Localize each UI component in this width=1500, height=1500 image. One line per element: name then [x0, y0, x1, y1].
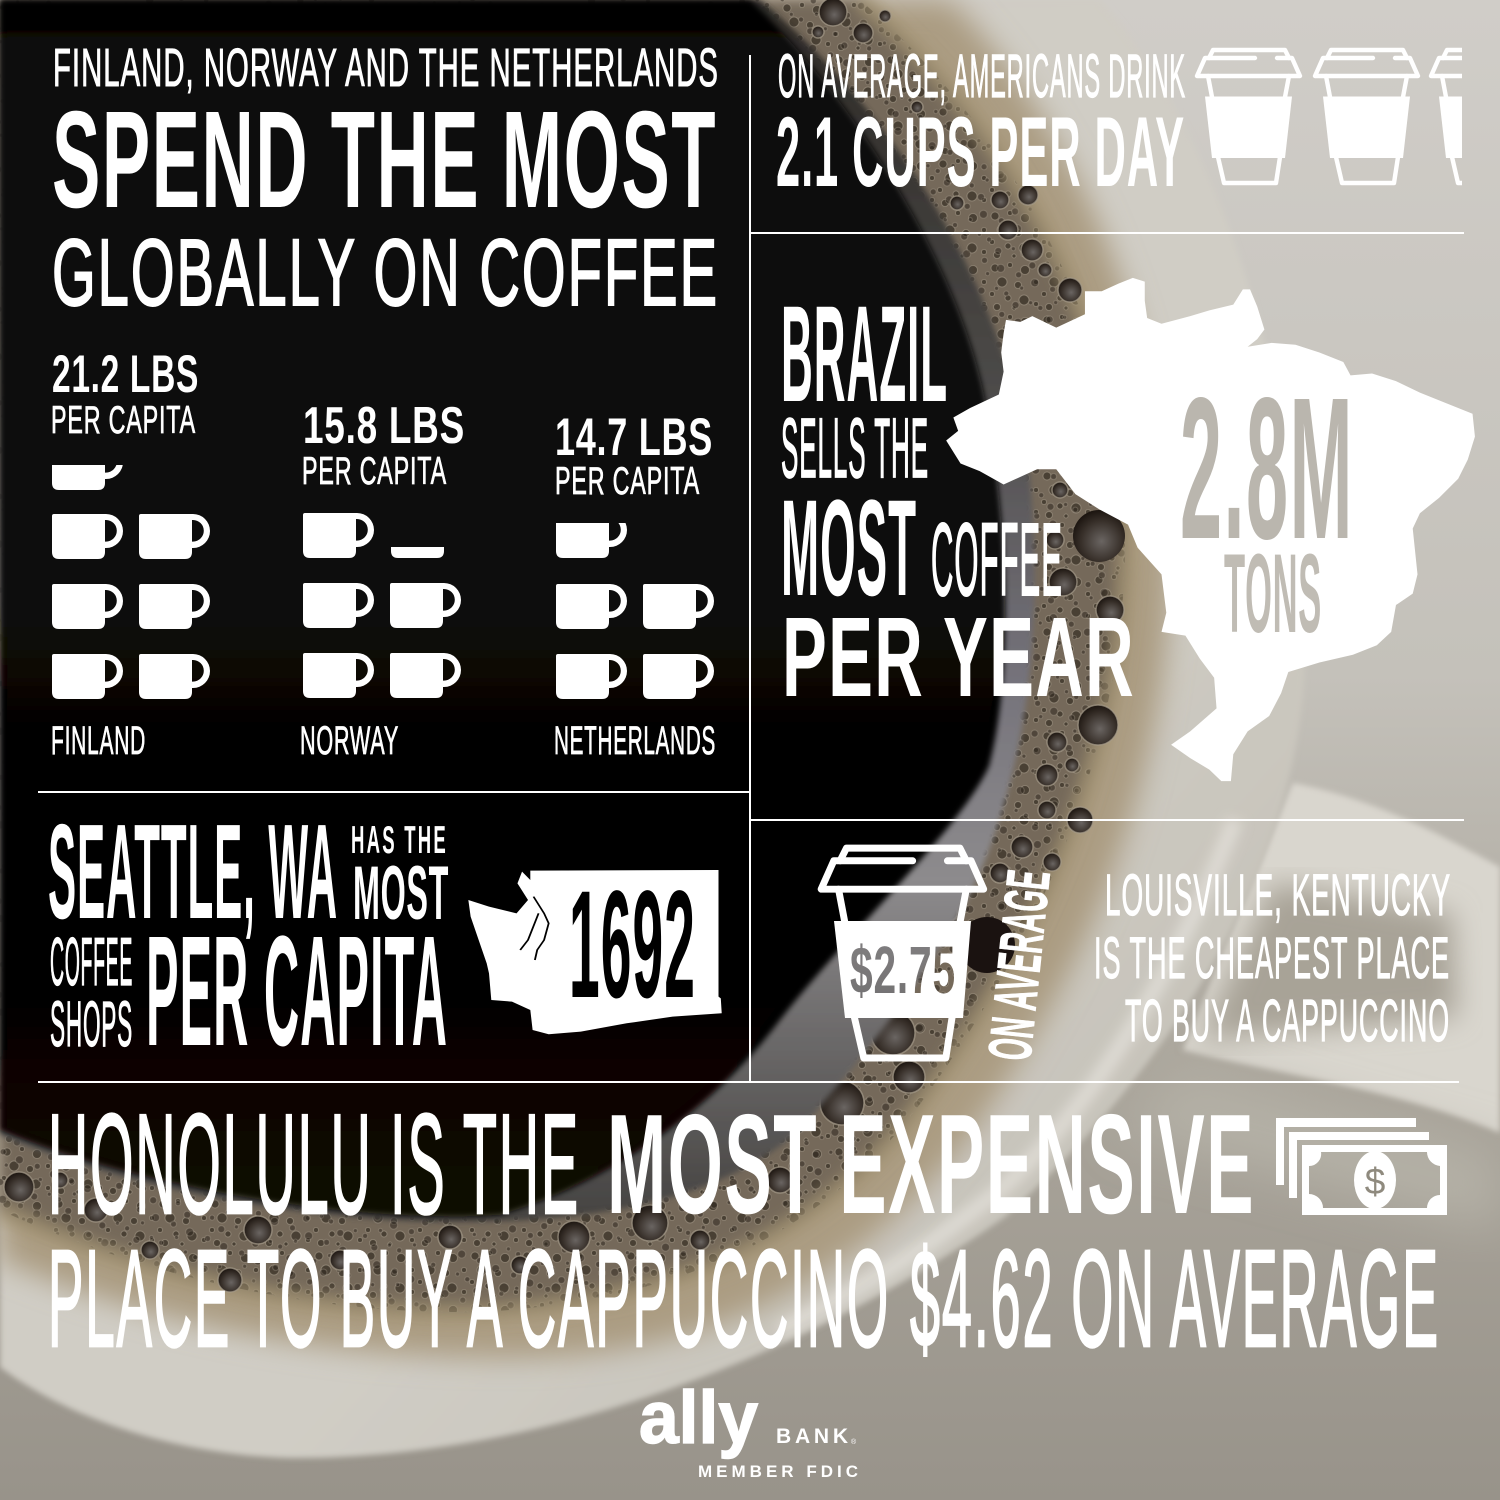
- panel: Seattle: PER CAPITA: [146, 904, 448, 1079]
- text: per year: PER YEAR: [782, 594, 1135, 720]
- icons: Finland mugs: [52, 514, 210, 699]
- panel: Seattle: [48, 796, 722, 1079]
- panel: Brazil: SELLS THE: [781, 401, 929, 495]
- icon: takeaway cup 2: [1315, 50, 1418, 183]
- panel: Seattle: COFFEE: [50, 924, 133, 1000]
- stat: Norway pounds: 15.8 LBS: [303, 397, 465, 455]
- label: Netherlands: NETHERLANDS: [554, 719, 716, 763]
- panel: Honolulu: [48, 1085, 1447, 1376]
- panel: Brazil: MOST: [781, 472, 917, 625]
- column: Finland: [51, 345, 210, 763]
- column: Netherlands: [554, 408, 716, 763]
- icon: partial mug: [556, 523, 627, 558]
- member FDIC: MEMBER FDIC: [698, 1462, 858, 1481]
- stat: Netherlands pounds: 14.7 LBS: [555, 408, 713, 467]
- panel: Louisville: [821, 848, 1451, 1063]
- panel: Brazil: [781, 278, 1475, 781]
- panel: Seattle: SEATTLE, WA: [48, 796, 338, 947]
- divider lines: [38, 55, 1464, 1083]
- map: Brazil: [946, 278, 1475, 781]
- panel: top countries spending on coffee: [51, 38, 719, 763]
- icon: partial mug: [52, 465, 123, 490]
- panel: Seattle: SHOPS: [50, 988, 133, 1060]
- icon: partial mug: [391, 547, 444, 558]
- panel: American consumption: [778, 48, 1462, 187]
- text: 1692: [569, 859, 696, 1030]
- logo word: ally: [639, 1376, 758, 1459]
- logo: Ally Bank: [639, 1376, 858, 1481]
- map: Washington state: [468, 870, 722, 1034]
- icon: takeaway cup 1: [1197, 50, 1300, 183]
- bank word: BANK: [776, 1425, 848, 1448]
- heading: globally on coffee: GLOBALLY ON COFFEE: [52, 220, 719, 326]
- panel: Seattle: MOST: [353, 851, 449, 936]
- icon: stack of bills: $: [1365, 1161, 1385, 1202]
- panel: Seattle: HAS THE: [351, 819, 448, 862]
- icon: stack of bills: [1276, 1118, 1447, 1215]
- stat label: Finland per capita: PER CAPITA: [51, 399, 196, 442]
- icon: takeaway cup partial: [1428, 48, 1462, 186]
- icons: Netherlands mugs: [556, 584, 714, 699]
- panel: Honolulu: HONOLULU IS THE: [48, 1085, 580, 1244]
- icons: Norway mugs: [303, 513, 461, 698]
- stat label: Norway per capita: PER CAPITA: [302, 450, 447, 493]
- heading: spend the most: SPEND THE MOST: [52, 83, 717, 237]
- column: Norway: [300, 397, 465, 763]
- stat: Finland pounds: 21.2 LBS: [52, 345, 199, 404]
- label: Finland: FINLAND: [51, 719, 146, 763]
- heading: top line: FINLAND, NORWAY AND THE NETHERLANDS: [53, 38, 719, 98]
- panel: Brazil: BRAZIL: [781, 278, 948, 431]
- panel: Brazil: COFFEE: [931, 502, 1063, 617]
- icon: takeaway cup with price: [821, 848, 984, 1058]
- panel: Louisville: ON AVERAGE: [975, 866, 1063, 1063]
- registered mark: ®: [851, 1438, 857, 1446]
- label: Norway: NORWAY: [300, 719, 399, 763]
- stat label: Netherlands per capita: PER CAPITA: [555, 460, 700, 503]
